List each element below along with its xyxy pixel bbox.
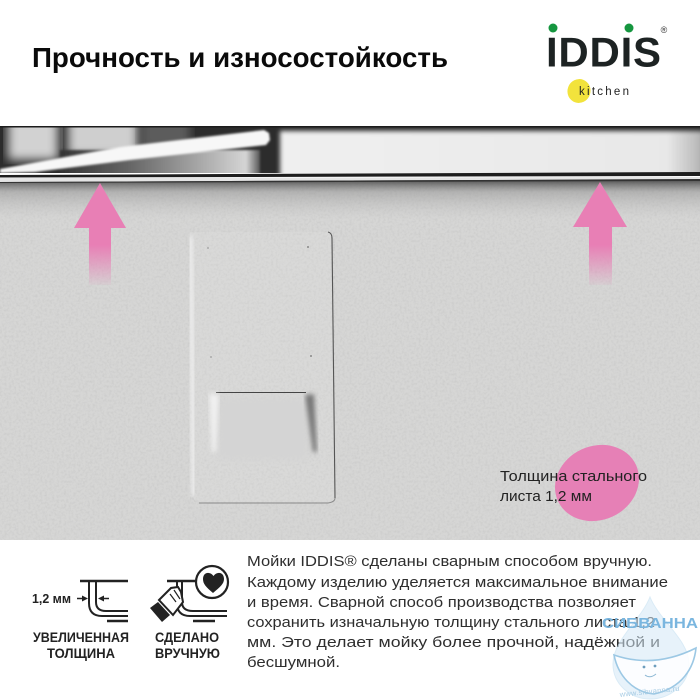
description text: и время. Сварной способ производства позволяет: [247, 594, 636, 611]
hand: [159, 587, 183, 615]
caption: increased thickness: ТОЛЩИНА: [47, 645, 115, 661]
watermark url: www.sibvanna.ru: [618, 684, 680, 699]
watermark drop: [613, 597, 689, 699]
logo wordmark: IDDIS: [546, 28, 661, 76]
caption: handmade: СДЕЛАНО: [155, 629, 219, 645]
icon: thickness profile: [32, 581, 128, 621]
thickness label: листа 1,2 мм: [500, 489, 592, 505]
steel sheet edge: [0, 172, 700, 178]
description text: сохранить изначальную толщину стального листа 1,2: [247, 614, 655, 631]
logo: IDDIS kitchen: ®: [661, 25, 668, 35]
logo yellow spot: [564, 76, 594, 106]
watermark: sibvanna: [602, 597, 698, 699]
icon: handmade with heart: [150, 566, 228, 622]
logo: IDDIS kitchen: [546, 24, 668, 106]
cuff: [150, 602, 170, 622]
description text: Мойки IDDIS® сделаны сварным способом вручную.: [247, 553, 652, 570]
heart badge: [196, 566, 228, 598]
screw dots: [207, 247, 209, 249]
arrow: left pink: [74, 183, 126, 285]
caption: handmade: ВРУЧНУЮ: [155, 645, 220, 661]
watermark tub: [614, 648, 696, 694]
textured underside: [0, 178, 700, 540]
embossed label plate: [190, 232, 335, 503]
description text: Каждому изделию уделяется максимальное внимание: [247, 574, 668, 591]
steel sink top: [0, 126, 700, 173]
caption: increased thickness: УВЕЛИЧЕННАЯ: [33, 629, 129, 645]
logo kitchen word: kitchen: [579, 86, 629, 98]
watermark name: СИБВАННА: [602, 615, 698, 632]
description text: мм. Это делает мойку более прочной, надёжной и: [247, 634, 660, 651]
title: Прочность и износостойкость: [32, 42, 448, 73]
pink spot: [542, 431, 652, 535]
arrow: right pink: [573, 182, 627, 285]
photo: sink steel edge and textured underside: [0, 115, 700, 540]
thickness value: 1,2 мм: [32, 591, 71, 606]
label pocket: [218, 398, 308, 460]
thickness label: Толщина стального: [500, 469, 647, 485]
description text: бесшумной.: [247, 654, 340, 671]
